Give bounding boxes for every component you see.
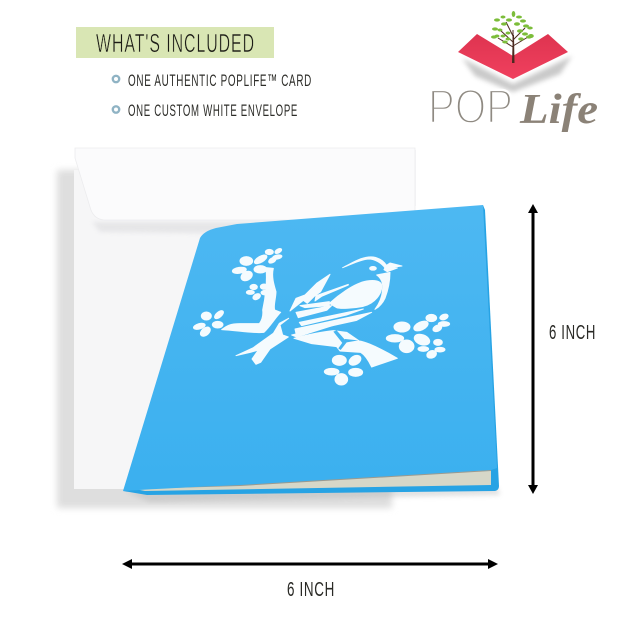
label: height 6 inch: 6 INCH	[549, 322, 596, 344]
envelope flap	[75, 148, 415, 220]
envelope body	[74, 170, 396, 489]
flower far left	[193, 309, 225, 338]
card front cover	[123, 205, 497, 491]
logo: PopLife	[428, 11, 598, 134]
flower upper left	[232, 247, 282, 283]
bird breast line	[375, 272, 390, 309]
arrow: width dimension	[122, 559, 498, 569]
logo wordmark POP: POP	[428, 81, 513, 134]
upper branch	[222, 268, 281, 333]
bird wing patch	[329, 280, 382, 308]
flower cluster right	[386, 313, 450, 359]
heading: what's included: WHAT'S INCLUDED	[96, 28, 255, 58]
item: white envelope	[113, 101, 298, 120]
tail cutout	[236, 318, 289, 364]
logo red open book	[458, 34, 568, 79]
item: authentic card: ONE AUTHENTIC POPLIFE™ CARD	[128, 71, 312, 90]
flower bottom	[324, 353, 363, 385]
card back cover	[123, 205, 499, 495]
heading: what's included	[76, 27, 274, 58]
bird beak	[384, 263, 402, 272]
item: authentic card	[113, 71, 312, 90]
envelope	[74, 148, 416, 489]
arrow: height dimension	[528, 204, 538, 494]
logo wordmark Life: Life	[519, 87, 598, 133]
list of included items	[113, 71, 312, 120]
card inner page	[135, 470, 491, 491]
envelope flap shadow	[92, 222, 400, 236]
bird head outline	[343, 257, 387, 268]
item: white envelope: ONE CUSTOM WHITE ENVELOPE	[128, 101, 298, 120]
label: width 6 inch: 6 INCH	[287, 579, 335, 601]
lower branch	[294, 331, 397, 367]
bird and branch cutout	[193, 247, 450, 385]
logo tree	[491, 11, 534, 63]
flower on branch	[246, 284, 270, 301]
card shadow	[126, 488, 500, 502]
bird eye	[370, 266, 376, 270]
greeting card	[123, 205, 500, 502]
envelope drop shadow	[57, 170, 392, 508]
feather cutouts	[290, 274, 330, 311]
blue legs	[333, 330, 346, 350]
logo book shadow	[462, 56, 572, 92]
